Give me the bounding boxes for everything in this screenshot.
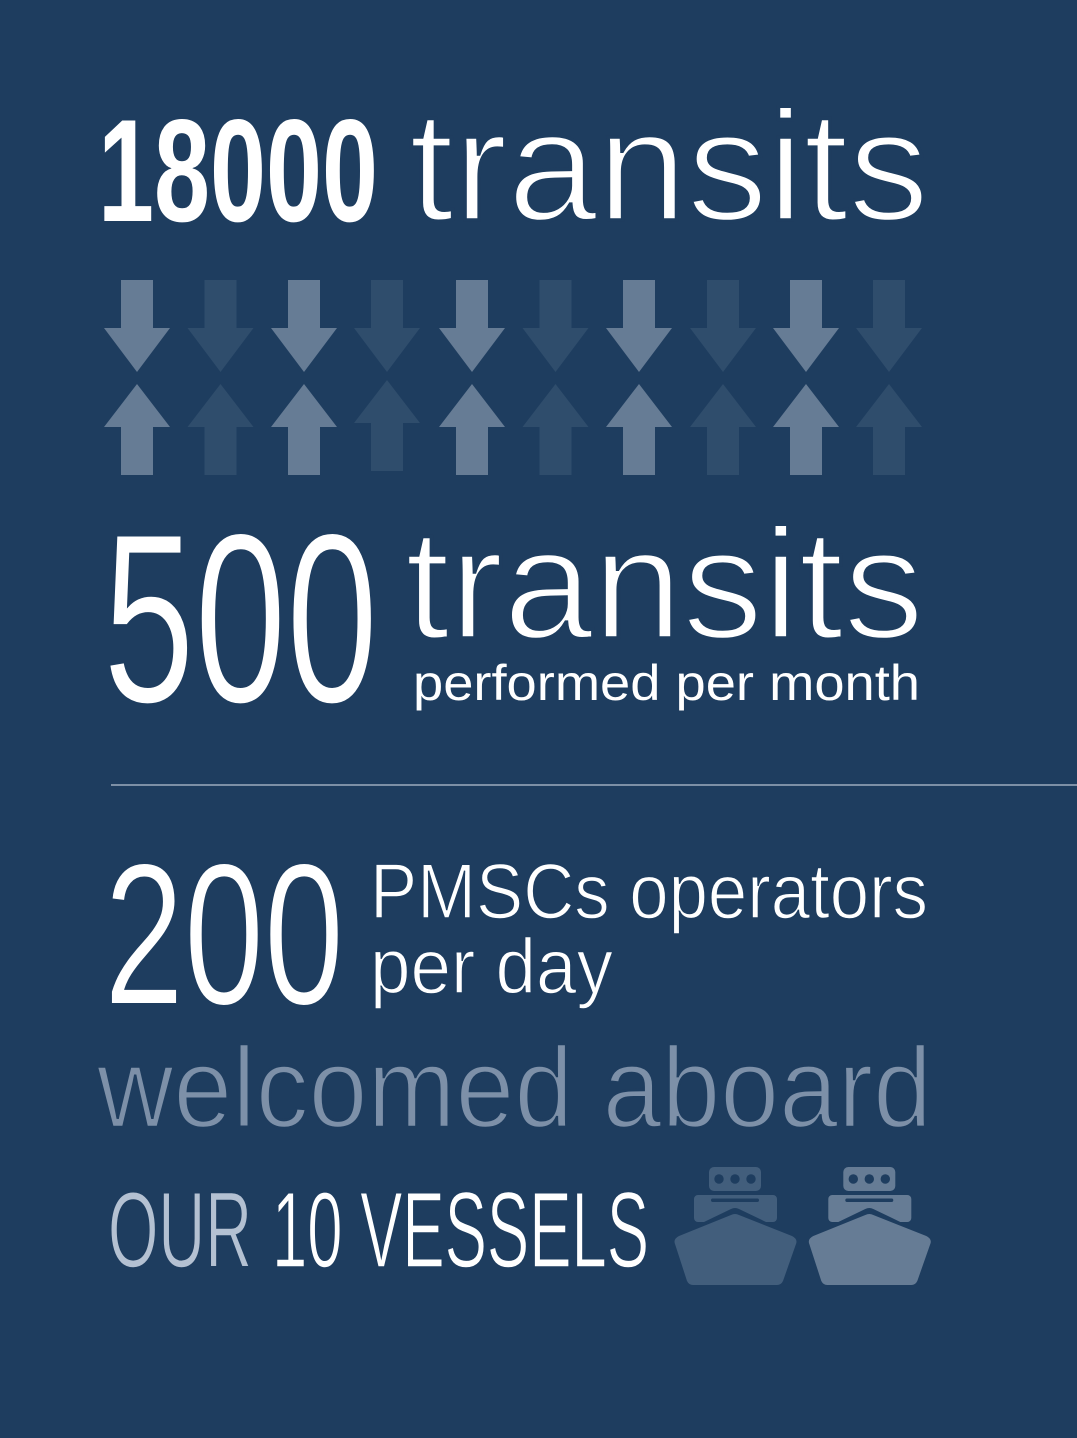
divider — [111, 784, 1077, 786]
statistic: 500 transits performed per month: performed per month — [413, 655, 920, 711]
heading: 18000 transits — [98, 79, 929, 254]
statistic: 500 transits performed per month: transits — [405, 497, 924, 672]
text: our 10 vessels: OUR — [108, 1169, 252, 1290]
statistic: 500 transits performed per month — [103, 484, 924, 754]
text: our 10 vessels — [108, 1169, 649, 1290]
statistic: 200 PMSCs operators per day: per day — [370, 922, 613, 1010]
statistic: 200 PMSCs operators per day: PMSCs operators — [370, 847, 928, 935]
text: welcomed aboard: welcomed aboard — [96, 1025, 932, 1152]
arrows: upward row — [104, 380, 922, 475]
statistic: 200 PMSCs operators per day: 200 — [104, 821, 344, 1047]
icon: ship — [809, 1167, 931, 1285]
heading: 18000 transits: 18000 — [98, 89, 378, 252]
arrows: downward row — [104, 280, 922, 372]
icon: ship — [674, 1167, 796, 1285]
statistic: 200 PMSCs operators per day — [104, 821, 928, 1047]
heading: 18000 transits: transits — [409, 79, 929, 254]
statistic: 500 transits performed per month: 500 — [103, 484, 378, 754]
text: our 10 vessels: 10 VESSELS — [272, 1169, 649, 1290]
